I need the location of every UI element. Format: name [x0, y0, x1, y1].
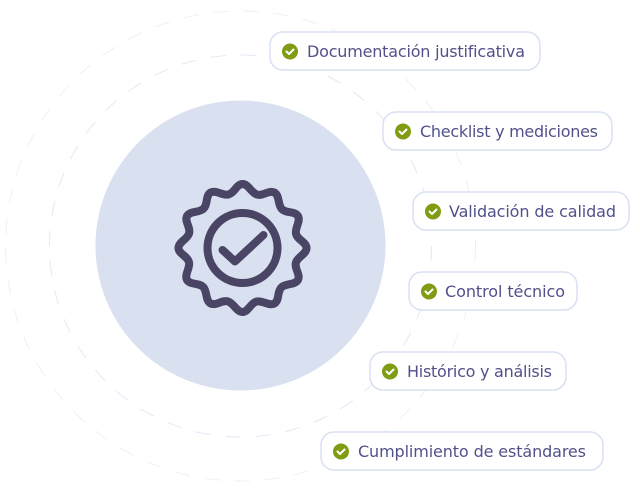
- item: Control técnico: [409, 272, 577, 310]
- item: Cumplimiento de estándares: [321, 432, 603, 470]
- item: Histórico y análisis: Histórico y análisis: [407, 362, 552, 381]
- outer dashed ring: [6, 11, 476, 481]
- item: Validación de calidad: [413, 192, 629, 230]
- item: Checklist y mediciones: Checklist y mediciones: [420, 122, 598, 141]
- item: Documentación justificativa: [270, 32, 540, 70]
- item: Documentación justificativa: Documentación justificativa: [307, 42, 525, 61]
- icon: quality seal with check: [171, 177, 314, 319]
- item: Control técnico: Control técnico: [445, 282, 565, 301]
- inner dashed ring: [50, 55, 432, 437]
- central circle: [96, 100, 386, 390]
- item: Histórico y análisis: [370, 352, 566, 390]
- item: Validación de calidad: Validación de calidad: [449, 202, 616, 221]
- item: Checklist y mediciones: [383, 112, 612, 150]
- item: Cumplimiento de estándares: Cumplimiento de estándares: [358, 442, 586, 461]
